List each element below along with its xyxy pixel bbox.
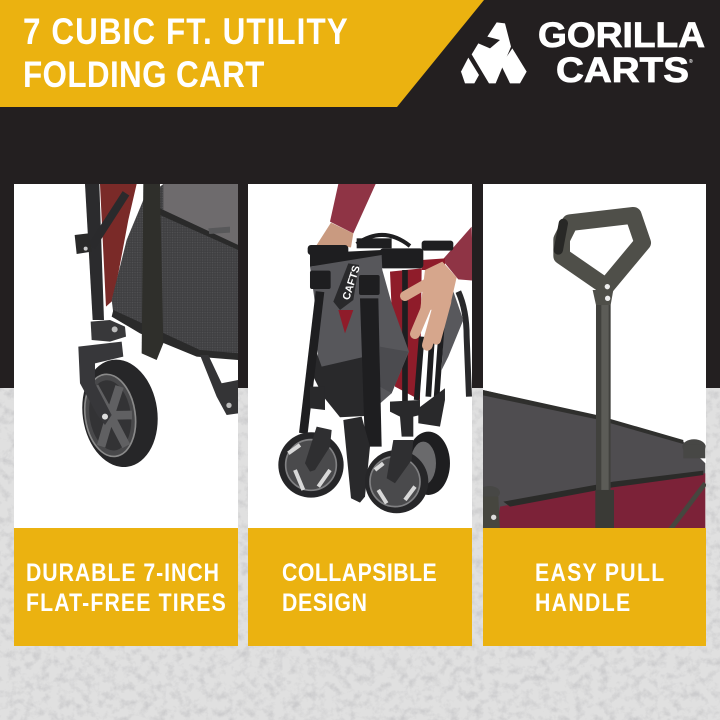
concrete background — [0, 388, 720, 720]
title banner: 7 CUBIC FT. UTILITY — [23, 12, 348, 53]
title banner: FOLDING CART — [23, 55, 264, 96]
caption box: FLAT-FREE TIRES — [26, 588, 226, 616]
photo: pull handle and cart — [479, 215, 706, 530]
caption box — [14, 528, 238, 646]
caption box — [483, 528, 706, 646]
panel: collapsible design — [248, 184, 473, 646]
photo: folded cart with hands: CAFTS — [340, 264, 363, 302]
caption box: DESIGN — [282, 588, 367, 616]
photo: cart wheel close-up — [75, 184, 238, 472]
right hand — [405, 262, 457, 345]
caption box: DURABLE 7-INCH — [26, 558, 219, 586]
black header background — [0, 0, 720, 388]
caption box: HANDLE — [535, 588, 630, 616]
title banner — [0, 0, 484, 107]
panel: easy pull handle — [479, 184, 706, 646]
logo: Gorilla Carts — [461, 16, 705, 90]
panel: durable tires — [14, 184, 238, 646]
caption box — [248, 528, 472, 646]
caption box: COLLAPSIBLE — [282, 558, 437, 586]
logo: Gorilla Carts: ® — [689, 58, 693, 65]
photo: folded cart with hands — [278, 184, 473, 513]
icon: gorilla — [461, 22, 527, 83]
logo: Gorilla Carts: GORILLA — [538, 16, 705, 55]
logo: Gorilla Carts: CARTS — [556, 51, 689, 90]
caption box: EASY PULL — [535, 558, 664, 586]
